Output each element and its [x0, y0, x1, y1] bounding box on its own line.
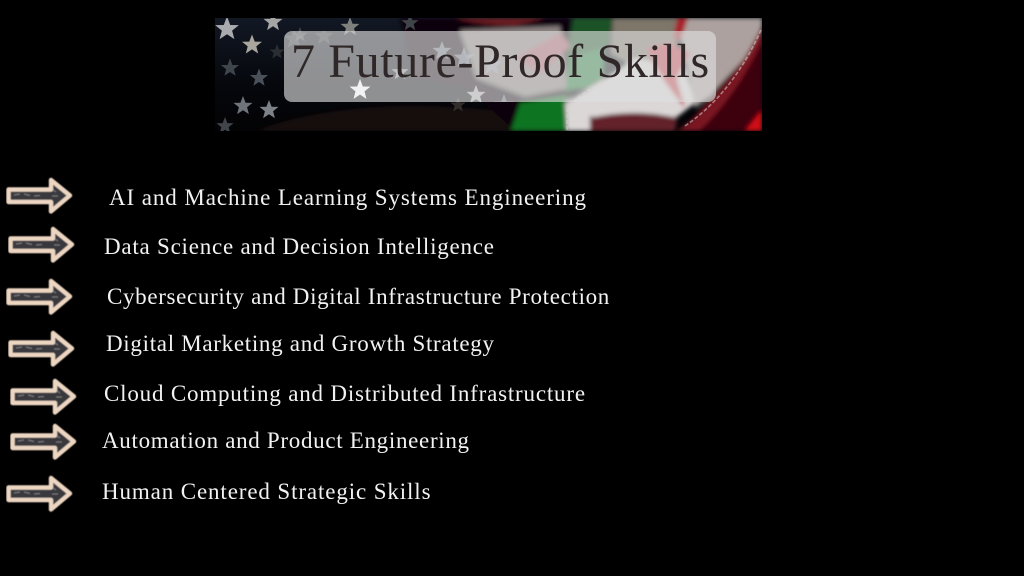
skill 5: Cloud Computing and Distributed Infrastructure	[104, 381, 586, 406]
skill 4: Digital Marketing and Growth Strategy	[106, 331, 495, 356]
skill 6: Automation and Product Engineering	[102, 428, 470, 453]
arrow 2	[8, 226, 75, 264]
banner: US and Iran flags	[215, 18, 762, 131]
title panel	[284, 31, 716, 102]
ornament	[567, 30, 761, 130]
skill 7: Human Centered Strategic Skills	[102, 479, 431, 504]
skill 2: Data Science and Decision Intelligence	[104, 234, 495, 259]
skill 1: AI and Machine Learning Systems Engineering	[109, 185, 587, 210]
arrow 5	[10, 378, 77, 416]
arrow 3	[6, 278, 73, 316]
skill 3: Cybersecurity and Digital Infrastructure Protection	[107, 284, 610, 309]
arrow 7	[6, 475, 73, 512]
title text: 7 Future-Proof Skills	[291, 35, 710, 88]
arrow 1	[6, 177, 73, 214]
arrow 4	[8, 330, 75, 368]
arrow 6	[10, 423, 77, 460]
